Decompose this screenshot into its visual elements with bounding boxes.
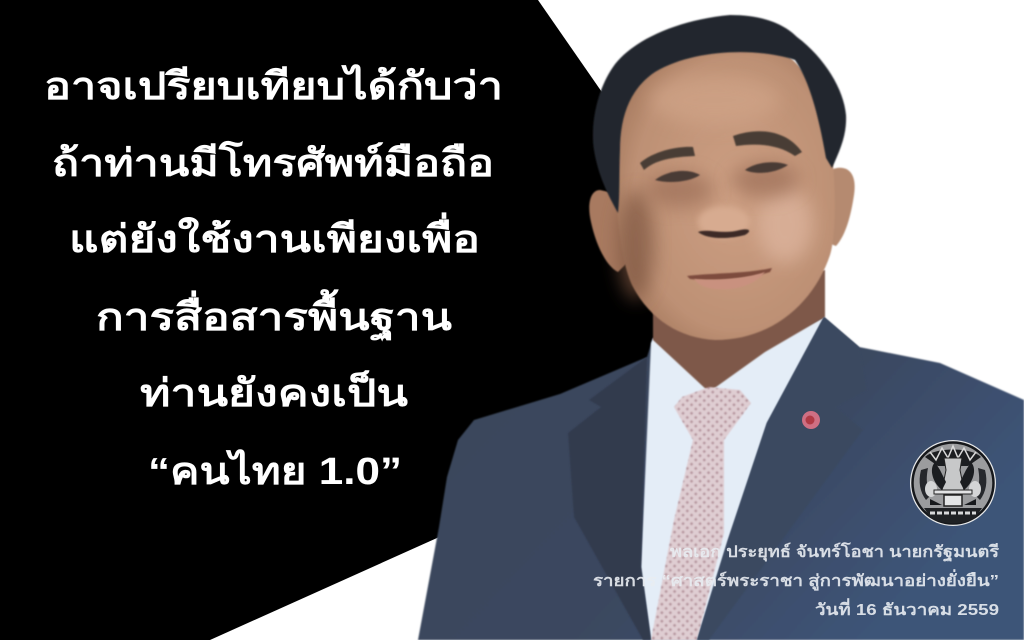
portrait: right lapel <box>697 317 867 640</box>
headline line 2: ถ้าท่านมีโทรศัพท์มือถือ <box>52 140 494 185</box>
portrait: lapel pin <box>802 411 820 429</box>
portrait: nose <box>698 206 750 238</box>
portrait: tie <box>651 387 751 640</box>
black diagonal panel <box>0 0 760 640</box>
portrait: eye socket shading right <box>731 162 799 198</box>
headline line 1: อาจเปรียบเทียบได้กับว่า <box>44 64 503 108</box>
caption line 2: รายการ “ศาสตร์พระราชา สู่การพัฒนาอย่างยั่งยืน” <box>593 569 999 592</box>
portrait: lower lip <box>694 272 765 289</box>
portrait: right cheek highlight <box>757 187 813 263</box>
headline line 3: แต่ยังใช้งานเพียงเพื่อ <box>69 212 480 261</box>
portrait: nostrils <box>698 229 749 238</box>
portrait: hair <box>593 15 846 213</box>
portrait: left eye <box>655 171 700 182</box>
headline line 5: ท่านยังคงเป็น <box>140 370 408 415</box>
portrait: left ear <box>589 190 630 272</box>
portrait: eye socket shading <box>646 172 714 208</box>
portrait: left cheek shading <box>618 190 654 300</box>
portrait: right ear <box>820 168 855 246</box>
portrait: face <box>616 48 835 340</box>
portrait: upper lip shadow <box>687 268 772 280</box>
caption line 3: วันที่ 16 ธันวาคม 2559 <box>815 598 999 619</box>
portrait: prime minister <box>418 15 1024 640</box>
portrait: left eyebrow <box>640 147 695 170</box>
portrait: right eye <box>745 162 788 173</box>
headline line 6: “คนไทย 1.0” <box>148 449 402 493</box>
portrait: shirt <box>641 317 824 640</box>
headline quote <box>44 64 503 493</box>
portrait: forehead highlight <box>650 75 780 125</box>
portrait: left lapel <box>568 357 651 640</box>
icon: government seal <box>910 440 996 526</box>
caption: speaker and programme <box>593 541 999 619</box>
portrait: neck <box>653 270 825 392</box>
caption line 1: พลเอก ประยุทธ์ จันทร์โอชา นายกรัฐมนตรี <box>670 541 999 562</box>
headline line 4: การสื่อสารพื้นฐาน <box>96 289 452 342</box>
portrait: suit jacket <box>418 317 1024 640</box>
portrait: right eyebrow <box>733 131 802 156</box>
